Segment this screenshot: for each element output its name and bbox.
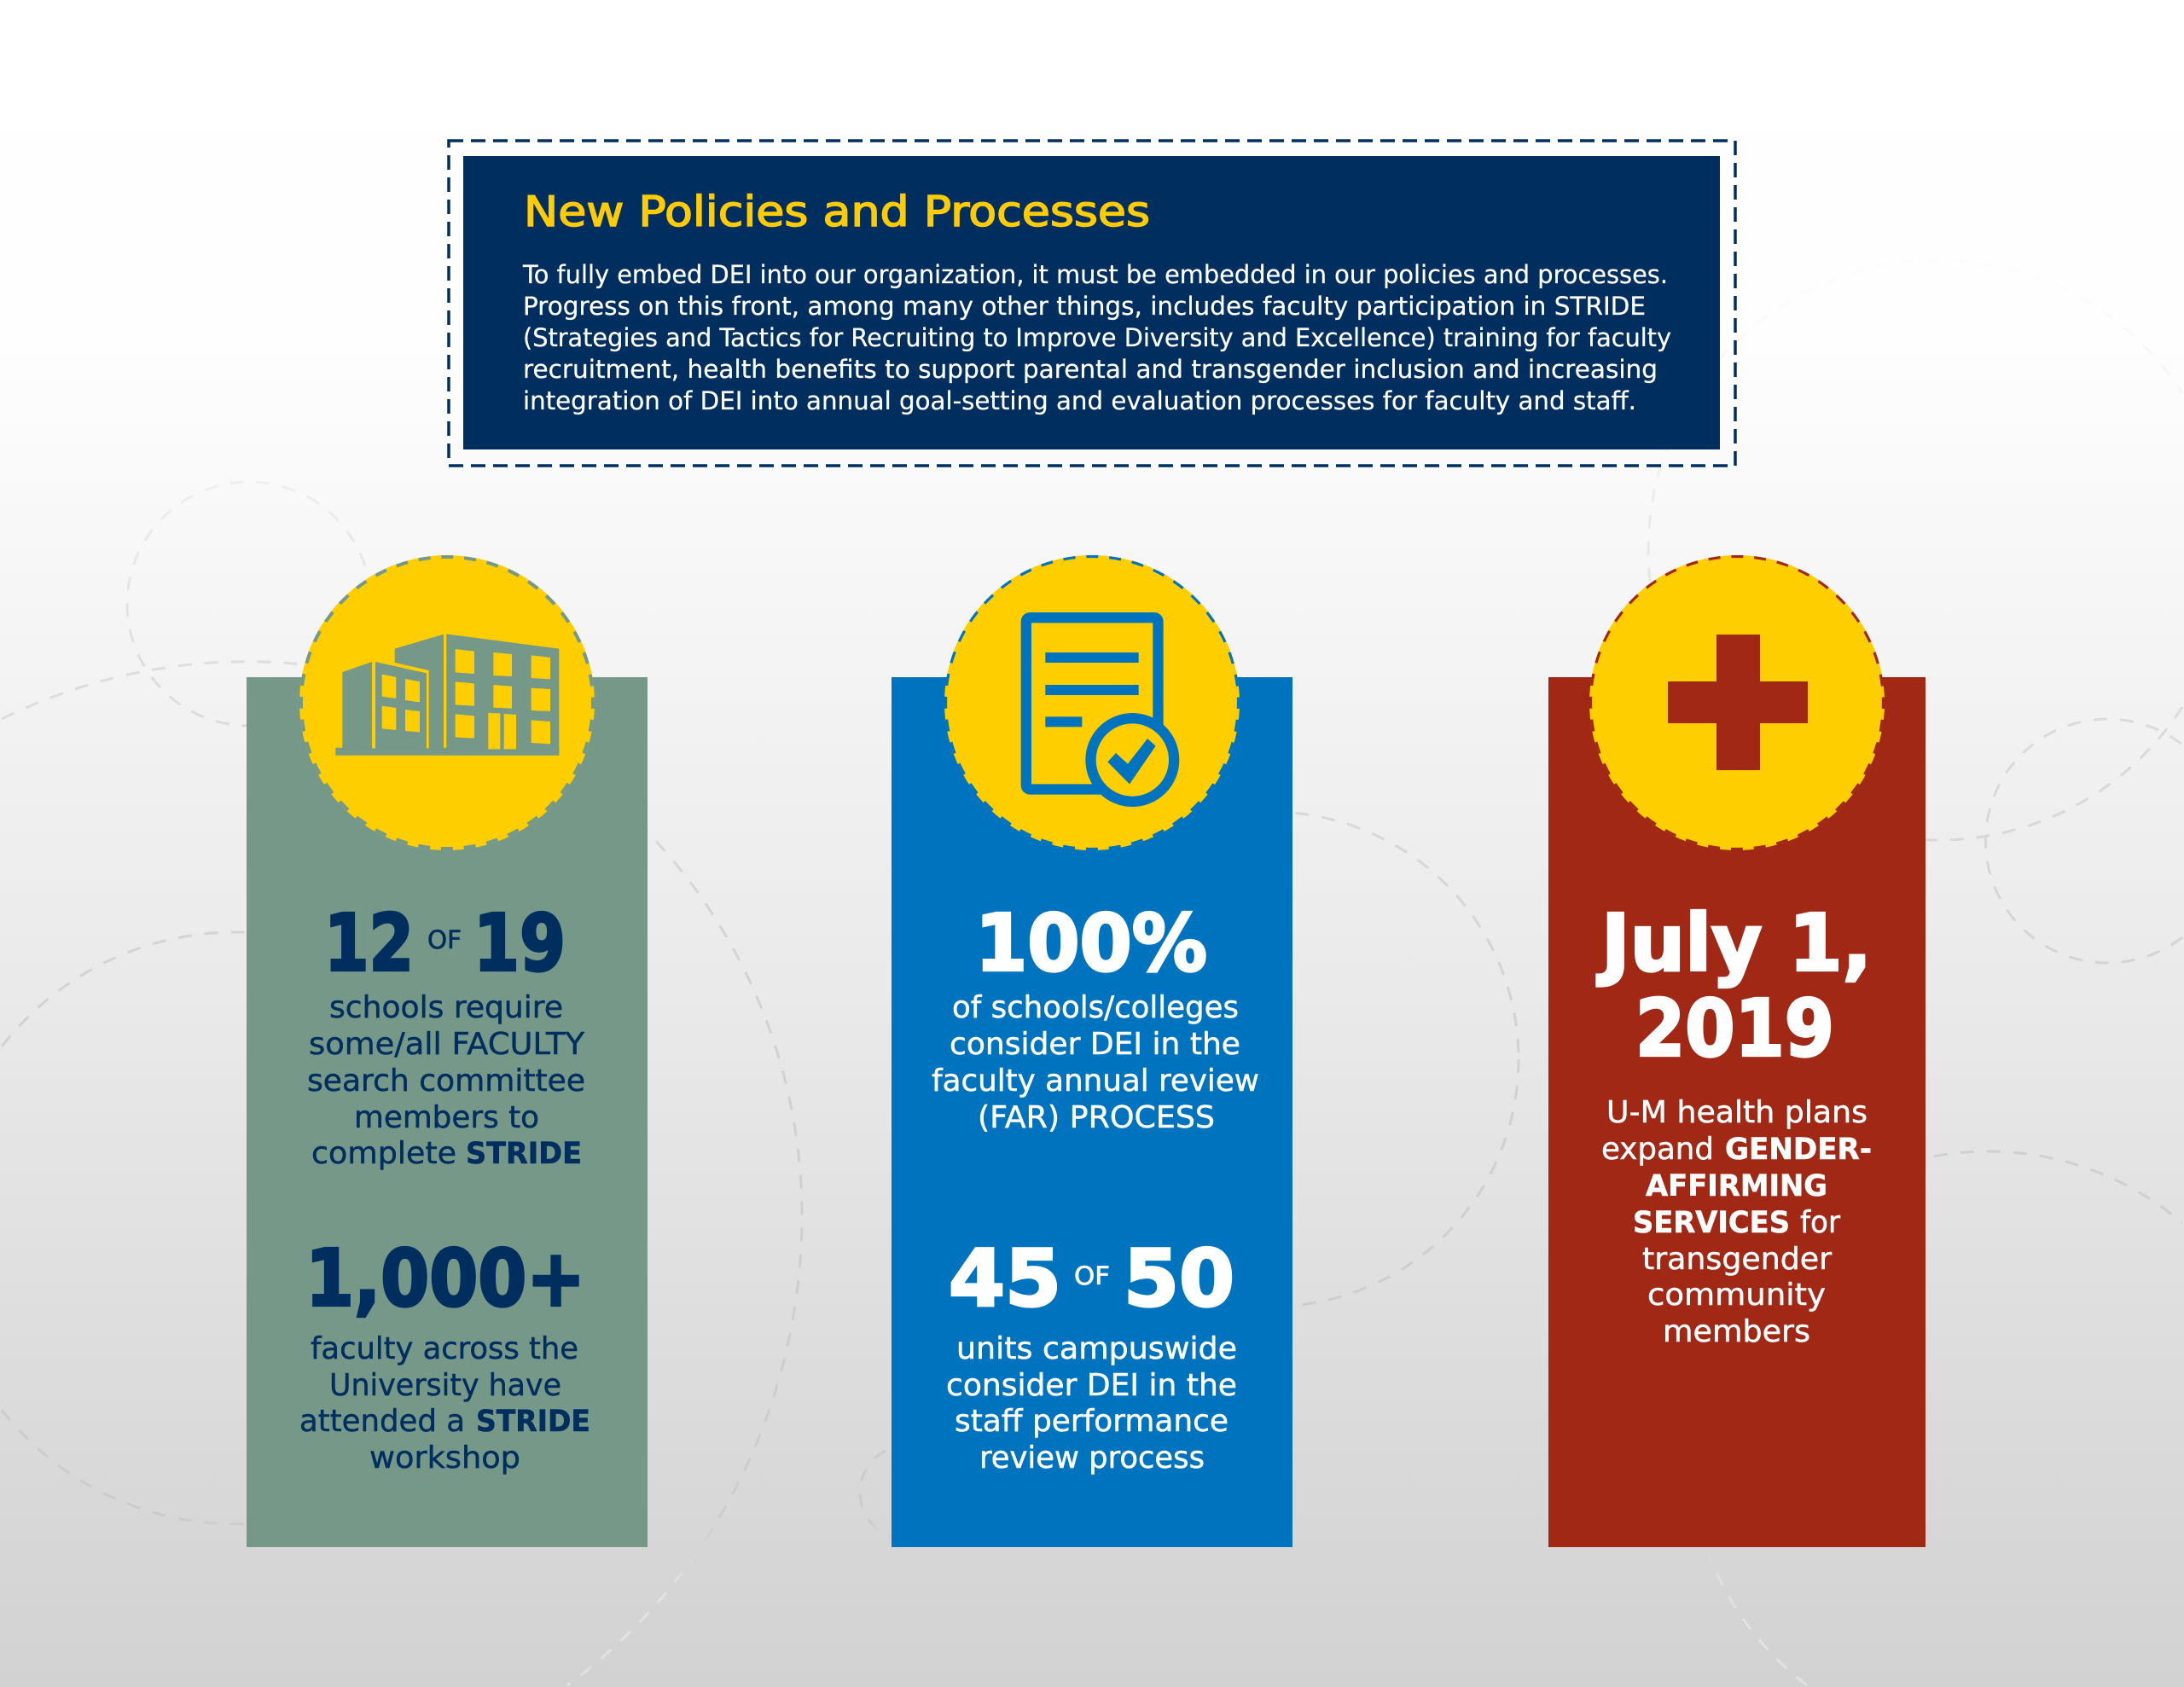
dashed frame [449, 141, 1735, 466]
stat: July 1, 2019: 2019 [1635, 983, 1834, 1075]
text: faculty annual review: consider DEI in the [950, 1027, 1240, 1062]
text: schools require stride: complete [311, 1136, 456, 1171]
stat: 45 of 50: 50 [1124, 1233, 1234, 1324]
text: faculty annual review: (FAR) PROCESS [978, 1100, 1215, 1135]
text: schools require stride: members to [354, 1100, 539, 1135]
stat: 1,000+: 1,000+ [305, 1233, 585, 1324]
text: staff performance review: consider DEI in the [946, 1368, 1237, 1403]
text: faculty attended stride [299, 1331, 590, 1475]
text: gender-affirming services: for [1800, 1205, 1840, 1240]
text: schools require stride: some/all FACULTY [309, 1027, 585, 1062]
text: staff performance review: units campuswide [956, 1331, 1237, 1366]
card background [247, 677, 648, 1547]
text: gender-affirming services: transgender [1642, 1242, 1832, 1277]
text: faculty annual review: of schools/colleges [952, 990, 1239, 1025]
text: gender-affirming services: AFFIRMING [1646, 1169, 1827, 1203]
panel: red health plans card [1548, 555, 1926, 1547]
stat: July 1, 2019 [1596, 897, 1872, 1075]
stat: 45 of 50: OF [1074, 1261, 1110, 1290]
navy box [463, 156, 1720, 449]
stat: 45 of 50 [949, 1233, 1234, 1324]
stat: 12 of 19: 19 [473, 897, 566, 989]
text: schools require stride: search committee [307, 1064, 585, 1099]
text: gender-affirming services: community [1647, 1278, 1826, 1313]
text: schools require stride [307, 990, 585, 1171]
panel: green faculty search card [247, 555, 648, 1547]
text: schools require stride: STRIDE [466, 1137, 582, 1171]
text: faculty annual review [932, 990, 1259, 1135]
text: faculty attended stride: attended a [299, 1404, 465, 1439]
text: gender-affirming services: GENDER- [1725, 1133, 1872, 1167]
text: schools require stride: schools require [329, 990, 563, 1025]
text: faculty attended stride: faculty across the [311, 1331, 578, 1366]
intro paragraph [522, 260, 1671, 415]
card background [892, 677, 1292, 1547]
stat: 45 of 50: 45 [949, 1233, 1061, 1324]
intro paragraph: recruitment, health benefits to support parental and transgender inclusion and increasing [523, 355, 1658, 384]
text: faculty annual review: faculty annual review [932, 1064, 1259, 1099]
icon badge: medical cross [1589, 555, 1885, 850]
text: faculty attended stride: STRIDE [476, 1405, 590, 1439]
text: staff performance review: staff performance [955, 1404, 1228, 1439]
intro paragraph: integration of DEI into annual goal-setting and evaluation processes for faculty and staff. [523, 386, 1636, 415]
stat: 100%: 100% [975, 897, 1207, 989]
text: faculty attended stride: workshop [369, 1441, 520, 1475]
icon badge: building [299, 555, 595, 850]
stat: July 1, 2019: July 1, [1596, 897, 1872, 989]
icon badge: checked document [944, 555, 1240, 850]
text: gender-affirming services [1601, 1095, 1872, 1349]
panel: new policies and processes [449, 141, 1735, 466]
text: staff performance review [946, 1331, 1237, 1475]
stat: 12 of 19: OF [427, 925, 462, 954]
text: gender-affirming services: expand [1601, 1132, 1714, 1167]
card background [1548, 677, 1926, 1547]
stat: 12 of 19: 12 [324, 897, 414, 989]
panel: blue review process card [892, 555, 1292, 1547]
text: gender-affirming services: U-M health plans [1606, 1095, 1867, 1130]
text: staff performance review: review process [979, 1441, 1205, 1475]
heading: New Policies and Processes [524, 188, 1150, 236]
stat: 12 of 19 [324, 897, 566, 989]
text: gender-affirming services: members [1663, 1314, 1810, 1349]
text: gender-affirming services: SERVICES [1633, 1206, 1790, 1240]
intro paragraph: To fully embed DEI into our organization, it must be embedded in our policies and processes. [522, 260, 1668, 289]
intro paragraph: Progress on this front, among many other things, includes faculty participation in STRIDE [523, 292, 1646, 321]
intro paragraph: (Strategies and Tactics for Recruiting to Improve Diversity and Excellence) training for faculty [523, 323, 1671, 352]
text: faculty attended stride: University have [329, 1368, 561, 1403]
